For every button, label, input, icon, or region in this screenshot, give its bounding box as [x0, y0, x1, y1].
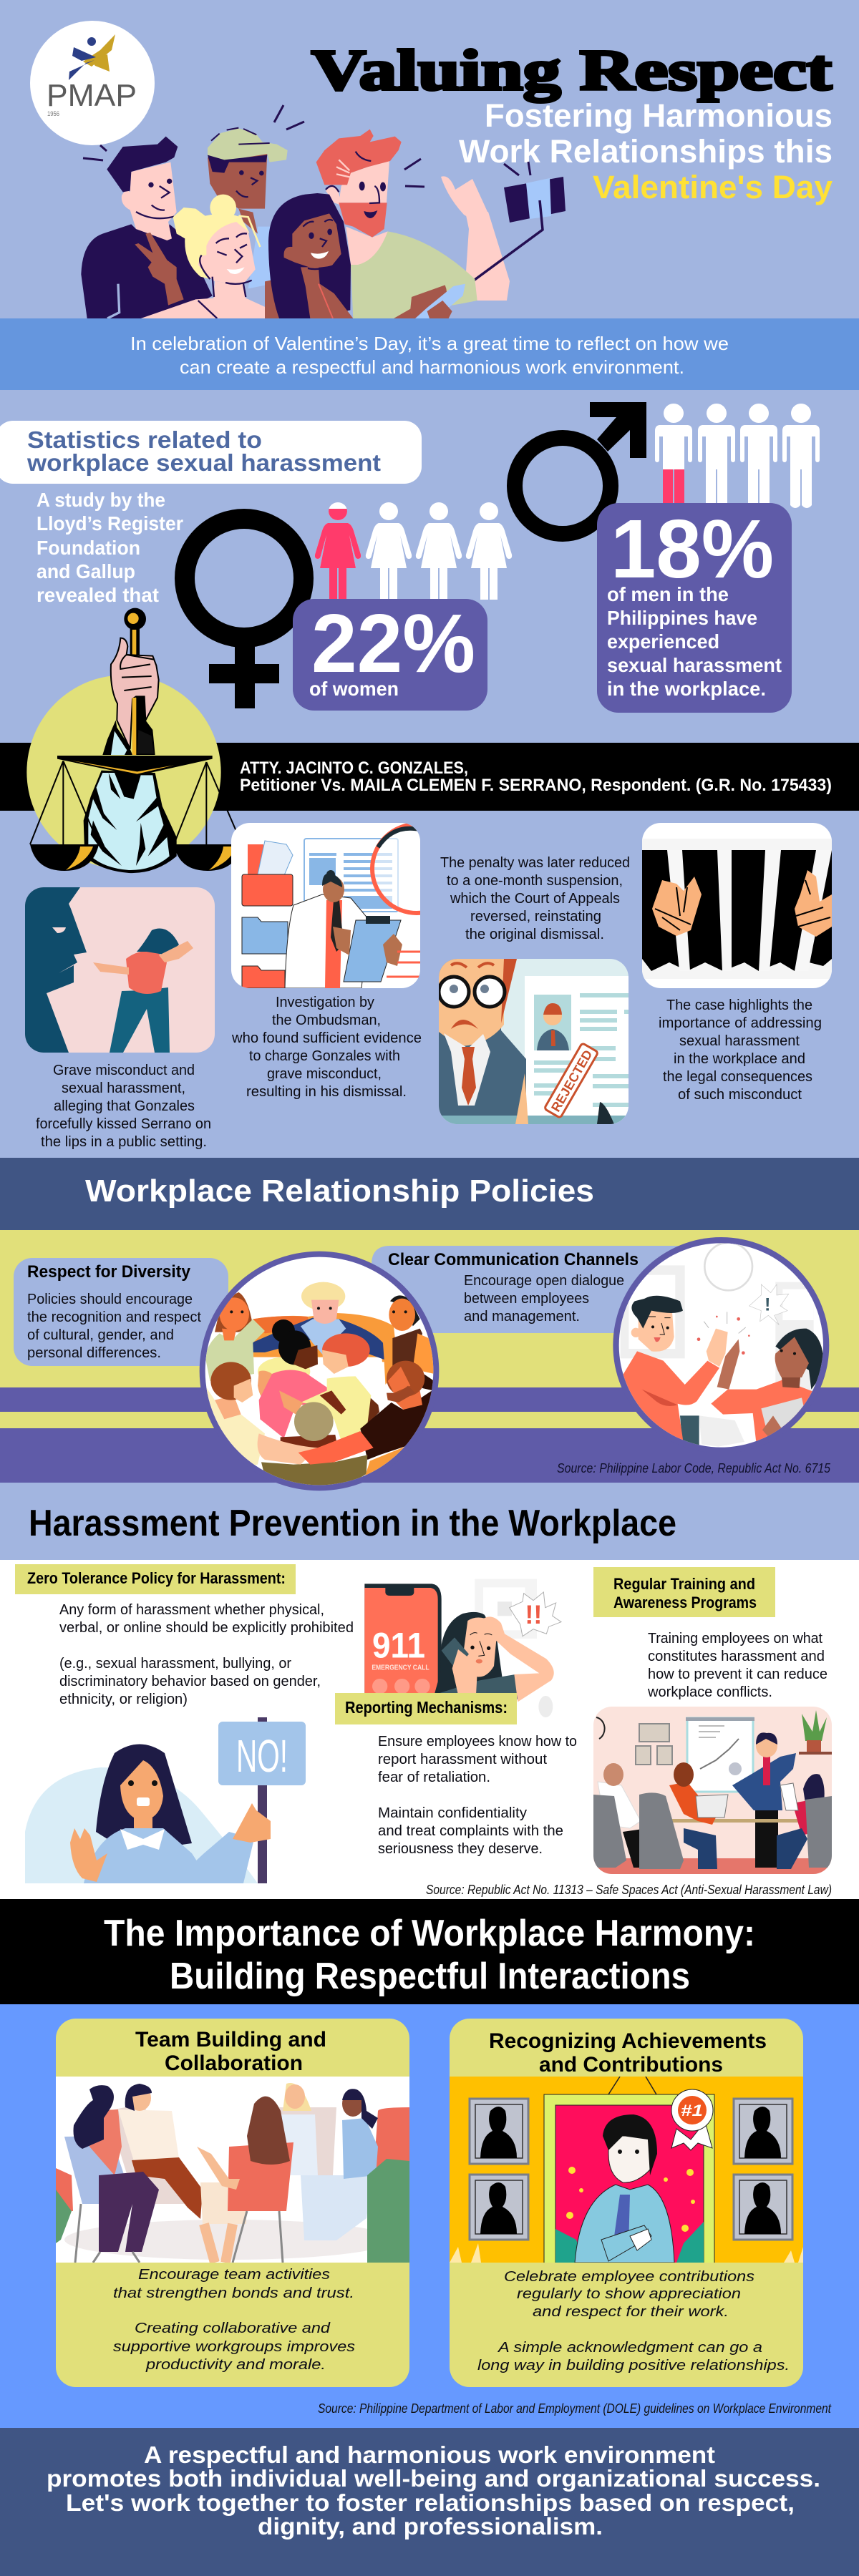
caption: case highlights — [659, 997, 822, 1103]
text: zero tolerance body: discriminatory behavior based on gender, — [59, 1674, 321, 1689]
stat card: 18% of men: in the workplace. — [607, 678, 766, 700]
illustration: woman holding NO sign: NO! — [236, 1730, 288, 1782]
label: regular training: Regular Training and — [613, 1575, 755, 1593]
man with cap and blue shirt — [208, 128, 288, 288]
text: study intro — [37, 489, 183, 606]
text: reporting body — [378, 1734, 577, 1857]
label: regular training: Awareness Programs — [613, 1594, 757, 1611]
woman with blonde hair — [141, 195, 272, 318]
caption: case highlights: the legal consequences — [663, 1069, 812, 1085]
illustration: employee of the month wall: #1 — [681, 2102, 703, 2119]
caption: case highlights: The case highlights the — [666, 997, 812, 1013]
panel: prevention white background — [0, 1560, 859, 1899]
illustration: group selfie — [81, 105, 566, 318]
band: case title: ATTY. JACINTO C. GONZALES, — [240, 758, 468, 778]
caption: case highlights: importance of addressing — [659, 1015, 822, 1031]
logo: PMAP — [30, 21, 155, 145]
caption: grave misconduct — [36, 1063, 211, 1150]
pictogram: women row — [315, 502, 512, 600]
logo: PMAP: 1956 — [47, 110, 59, 117]
card: respect for diversity: Respect for Diversity — [27, 1262, 191, 1282]
image card: rejected man — [439, 959, 629, 1124]
intro band: In celebration of Valentine’s Day, it’s a great time to reflect on how we — [130, 333, 729, 354]
text: training body: workplace conflicts. — [647, 1684, 772, 1700]
subtitle — [459, 97, 833, 205]
caption: investigation: grave misconduct, — [267, 1066, 382, 1082]
stat card: 22% of women: of women — [309, 678, 399, 700]
illustration: woman calling 911: 911 — [372, 1626, 425, 1666]
caption: investigation: the Ombudsman, — [272, 1013, 381, 1028]
text: reporting body: seriousness they deserve. — [378, 1841, 543, 1857]
card: respect for diversity: of cultural, gender, and — [27, 1327, 174, 1343]
stat card: 22% of women — [293, 597, 487, 711]
image card: rejected man: REJECTED — [548, 1048, 596, 1114]
closing band: A respectful and harmonious work environment — [144, 2441, 715, 2468]
illustration: training room — [593, 1707, 832, 1874]
caption: investigation: to charge Gonzales with — [249, 1048, 400, 1064]
woman with dark hair — [265, 193, 465, 318]
caption: investigation: resulting in his dismissal. — [246, 1084, 407, 1100]
heading band: workplace relationship policies — [0, 1158, 859, 1230]
subtitle: Fostering Harmonious — [485, 97, 833, 134]
caption: case highlights: in the workplace and — [674, 1051, 805, 1067]
logo: PMAP: PMAP — [47, 78, 137, 113]
illustration: scales of justice — [26, 608, 242, 873]
subtitle: Valentine's Day — [593, 169, 833, 205]
closing band — [0, 2428, 859, 2576]
card: recognizing achievements: and Contributions — [539, 2053, 723, 2077]
card: recognizing achievements: regularly to show appreciation — [517, 2286, 741, 2302]
label: regular training — [593, 1567, 775, 1617]
caption: investigation: Investigation by — [276, 995, 374, 1010]
illustration: woman calling 911: EMERGENCY CALL — [372, 1664, 430, 1672]
motion lines — [83, 105, 530, 187]
image card: harasser silhouette and woman — [25, 887, 215, 1053]
caption: case highlights: of such misconduct — [678, 1087, 802, 1103]
caption: grave misconduct: forcefully kissed Serrano on — [36, 1116, 211, 1132]
card: clear communication channels: Encourage open dialogue — [464, 1273, 624, 1289]
text: zero tolerance body: (e.g., sexual harassment, bullying, or — [59, 1656, 291, 1672]
hand on handle — [394, 285, 449, 318]
caption: penalty reduced: reversed, reinstating — [470, 909, 601, 924]
heading band: workplace relationship policies: Workplace Relationship Policies — [85, 1174, 594, 1209]
panel: striped policy background — [0, 1230, 859, 1483]
text: zero tolerance body: Any form of harassment whether physical, — [59, 1602, 324, 1618]
card: recognizing achievements: long way in building positive relationships. — [477, 2358, 790, 2373]
text: training body: constitutes harassment and — [648, 1649, 825, 1664]
stat card: 18% of men: 18% — [611, 502, 774, 595]
illustration: high five — [613, 1237, 829, 1448]
text: reporting body: fear of retaliation. — [378, 1770, 490, 1785]
panel: harmony blue background — [0, 2004, 859, 2428]
band: case title — [0, 743, 859, 811]
image card: hands gripping prison bars — [642, 823, 832, 988]
text: study intro: and Gallup — [37, 560, 135, 582]
card: recognizing achievements — [450, 2019, 803, 2387]
title: Valuing Respect — [311, 39, 832, 102]
card: clear communication channels — [372, 1246, 687, 1333]
man with dark hair — [81, 137, 213, 318]
subtitle: Work Relationships this — [459, 133, 833, 170]
stat card: 22% of women: 22% — [311, 597, 475, 690]
card: team building: productivity and morale. — [145, 2357, 326, 2373]
card: clear communication channels: between employees — [464, 1291, 589, 1307]
caption: grave misconduct: the lips in a public setting. — [41, 1134, 207, 1150]
card: respect for diversity: personal differences. — [27, 1345, 161, 1361]
card: clear communication channels: and management. — [464, 1309, 580, 1324]
pictogram: men row — [655, 404, 820, 508]
card: team building: Collaboration — [165, 2051, 303, 2075]
card: recognizing achievements: Celebrate employee contributions — [504, 2269, 754, 2285]
card: team building: supportive workgroups improves — [113, 2339, 355, 2355]
card: respect for diversity: the recognition and respect — [27, 1309, 201, 1325]
card: recognizing achievements: Recognizing Achievements — [489, 2029, 767, 2053]
text: training body: how to prevent it can reduce — [648, 1667, 828, 1682]
closing band: promotes both individual well-being and organizational success. — [47, 2465, 820, 2492]
caption: grave misconduct: sexual harassment, — [62, 1080, 185, 1096]
text: training body — [647, 1631, 828, 1700]
text: zero tolerance body — [59, 1602, 354, 1707]
raised arm and selfie stick — [441, 176, 566, 301]
card: team building — [56, 2019, 409, 2387]
panel: statistics heading: Statistics related to — [27, 426, 262, 453]
illustration: diverse group hug — [199, 1251, 440, 1491]
stat card: 18% of men: Philippines have — [607, 607, 757, 629]
intro band — [0, 318, 859, 390]
closing band: dignity, and professionalism. — [258, 2513, 603, 2540]
text: zero tolerance body: verbal, or online should be explicitly prohibited — [59, 1620, 354, 1636]
card: team building: Team Building and — [135, 2028, 326, 2051]
card: team building: Encourage team activities — [138, 2267, 330, 2283]
stat card: 18% of men — [597, 502, 792, 713]
label: zero tolerance: Zero Tolerance Policy for Harassment: — [27, 1569, 286, 1587]
heading band: importance of harmony — [0, 1899, 859, 2004]
illustration: high five: ! — [765, 1295, 770, 1315]
icon: male symbol — [515, 402, 646, 534]
text: study intro: Foundation — [37, 537, 140, 559]
card: team building: that strengthen bonds and trust. — [113, 2285, 354, 2301]
stat card: 18% of men: experienced — [607, 630, 719, 653]
closing band: Let's work together to foster relationships based on respect, — [66, 2489, 795, 2516]
caption: investigation: who found sufficient evidence — [231, 1030, 422, 1046]
text: study intro: A study by the — [37, 489, 165, 511]
card: clear communication channels: Clear Communication Channels — [388, 1250, 639, 1269]
caption: grave misconduct: Grave misconduct and — [53, 1063, 195, 1078]
icon: female symbol — [185, 519, 304, 708]
caption: penalty reduced — [440, 855, 630, 942]
caption: penalty reduced: which the Court of Appeals — [450, 891, 620, 907]
card: respect for diversity — [14, 1258, 228, 1366]
illustration: woman calling 911: !! — [525, 1600, 542, 1629]
text: reporting body: Ensure employees know how to — [378, 1734, 577, 1750]
caption: investigation — [231, 995, 422, 1100]
illustration: woman holding NO sign — [25, 1717, 306, 1883]
intro band: can create a respectful and harmonious work environment. — [180, 356, 684, 378]
text: study intro: Lloyd’s Register — [37, 512, 183, 535]
image card: investigator with clipboard — [231, 823, 420, 988]
illustration: employee of the month wall — [450, 2077, 803, 2266]
label: reporting mechanisms: Reporting Mechanisms: — [345, 1698, 508, 1717]
text: study intro: revealed that — [37, 584, 159, 606]
label: reporting mechanisms — [335, 1693, 517, 1724]
illustration: team discussion circle — [56, 2077, 409, 2263]
text: training body: Training employees on what — [648, 1631, 822, 1646]
caption: penalty reduced: the original dismissal. — [465, 927, 604, 942]
heading band: importance of harmony: The Importance of Workplace Harmony: — [104, 1913, 755, 1954]
heading band: importance of harmony: Building Respectful Interactions — [170, 1956, 690, 1997]
card: team building: Creating collaborative and — [135, 2321, 331, 2336]
text: reporting body: Maintain confidentiality — [378, 1805, 527, 1821]
caption: penalty reduced: to a one-month suspension, — [447, 873, 623, 889]
card: recognizing achievements: and respect for their work. — [533, 2304, 729, 2320]
source: policies: Source: Philippine Labor Code, Republic Act No. 6715 — [557, 1461, 831, 1475]
card: respect for diversity: Policies should encourage — [27, 1292, 193, 1307]
illustration: woman calling 911 — [364, 1579, 561, 1717]
stat card: 18% of men: of men in the — [607, 583, 729, 605]
text: reporting body: report harassment without — [378, 1752, 547, 1767]
stat card: 18% of men: sexual harassment — [607, 654, 782, 676]
panel: statistics heading: workplace sexual harassment — [26, 449, 381, 476]
label: zero tolerance — [15, 1564, 296, 1594]
band: case title: Petitioner Vs. MAILA CLEMEN F. SERRANO, Respondent. (G.R. No. 175433) — [240, 776, 832, 795]
card: recognizing achievements: A simple acknowledgment can go a — [498, 2340, 762, 2356]
caption: penalty reduced: The penalty was later reduced — [440, 855, 630, 871]
text: reporting body: and treat complaints with the — [378, 1823, 563, 1839]
man with red beard — [316, 130, 477, 318]
panel: statistics heading — [0, 421, 422, 484]
caption: case highlights: sexual harassment — [679, 1033, 800, 1049]
text: zero tolerance body: ethnicity, or religion) — [59, 1692, 188, 1707]
heading: harassment prevention: Harassment Prevention in the Workplace — [29, 1503, 676, 1544]
caption: grave misconduct: alleging that Gonzales — [54, 1098, 195, 1114]
